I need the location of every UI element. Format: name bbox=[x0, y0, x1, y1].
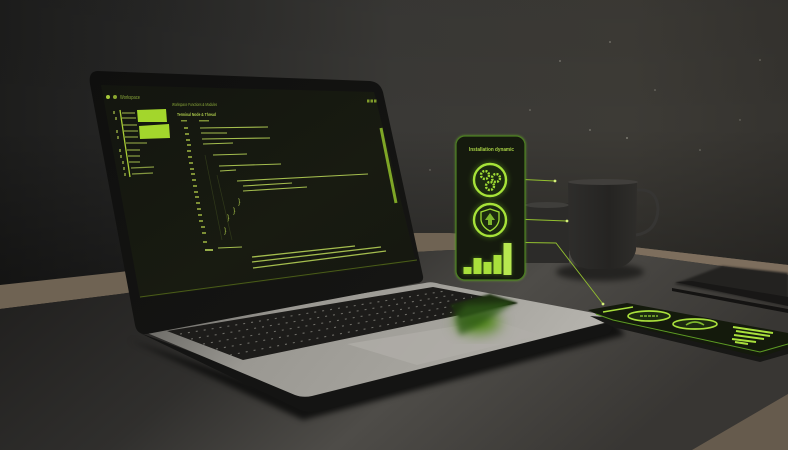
connector lines bbox=[492, 178, 604, 305]
mug shadow bbox=[556, 263, 644, 281]
flat phone icon details bbox=[640, 316, 704, 325]
keyboard bbox=[167, 287, 518, 360]
base top bbox=[140, 282, 613, 397]
laptop shadow bbox=[130, 320, 625, 420]
flat phone bbox=[588, 303, 788, 362]
laptop bbox=[90, 71, 625, 420]
code braces: } bbox=[233, 208, 236, 215]
green reflection on keyboard and palm rest bbox=[450, 294, 518, 335]
screen bbox=[101, 85, 416, 298]
shield icon bbox=[471, 201, 509, 239]
lid bbox=[90, 71, 423, 334]
mug body bbox=[568, 182, 637, 269]
header: Workspace Functions & Modules bbox=[172, 102, 218, 107]
upright phone bbox=[455, 135, 526, 281]
trackpad bbox=[347, 320, 540, 365]
header bbox=[106, 95, 377, 118]
scrollbar bbox=[381, 128, 396, 203]
phone bar chart bbox=[463, 243, 512, 275]
mug handle bbox=[636, 190, 658, 235]
code braces bbox=[224, 199, 241, 235]
second cup bbox=[525, 202, 569, 263]
code braces: } bbox=[227, 215, 230, 222]
dust specks bbox=[429, 41, 761, 171]
desk surface bbox=[0, 250, 788, 450]
indent guides bbox=[205, 155, 232, 240]
flat phone icons bbox=[628, 311, 717, 329]
line numbers bbox=[181, 120, 209, 243]
notebook on desk bbox=[672, 266, 788, 313]
screen bottom line bbox=[140, 260, 417, 297]
mug rim bbox=[568, 179, 638, 185]
gears icon bbox=[471, 161, 509, 199]
sidebar bbox=[113, 109, 170, 177]
background wall bbox=[0, 0, 788, 320]
base underside bbox=[140, 322, 612, 412]
phone title: Installation dynamic bbox=[469, 147, 514, 153]
flat phone bar chart bbox=[732, 327, 773, 344]
header: Terminal Node & Thread bbox=[177, 112, 216, 118]
desk corner, bottom right bbox=[692, 394, 788, 450]
code braces: } bbox=[238, 199, 241, 206]
mug and cup behind it bbox=[525, 179, 658, 281]
code lines bbox=[200, 127, 386, 268]
screen contents bbox=[106, 95, 417, 297]
flat phone title bbox=[603, 307, 633, 312]
header: Workspace bbox=[120, 95, 140, 101]
beige desk edge bbox=[0, 233, 788, 309]
code braces: } bbox=[224, 228, 227, 235]
